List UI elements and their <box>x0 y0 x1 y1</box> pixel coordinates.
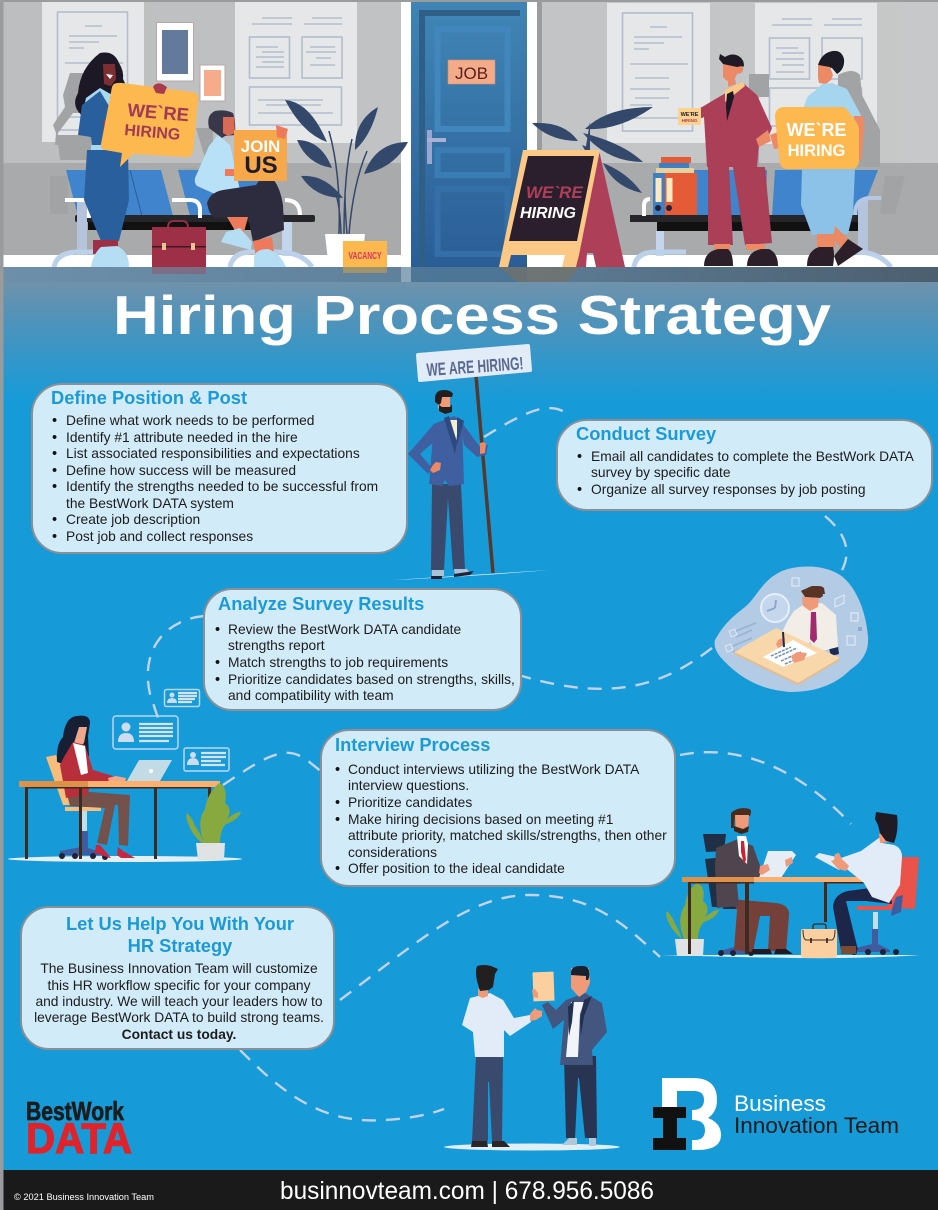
briefcase <box>152 221 206 267</box>
waiting bench: right <box>630 170 891 267</box>
bullet list: analyze survey: • <box>215 655 220 671</box>
bullet list: interview process: Offer position to the ideal candidate <box>348 861 565 876</box>
heading: interview process: Interview Process <box>335 734 490 755</box>
desk <box>19 781 88 787</box>
potted plant and vacancy sign <box>285 100 408 272</box>
seated woman with join us sign <box>195 110 288 267</box>
heading: analyze survey: Analyze Survey Results <box>218 593 424 614</box>
bullet list: define position: • <box>52 479 57 495</box>
left edge rule <box>0 0 4 1210</box>
bullet list: define position: the BestWork DATA system <box>66 496 234 511</box>
a-frame sign: HIRING <box>520 205 576 222</box>
body text: let us help you: The Business Innovation Team will customize <box>40 961 318 976</box>
illustration: two men with document <box>444 965 620 1150</box>
bullet list: interview process: • <box>335 812 340 828</box>
bullet list: conduct survey: survey by specific date <box>591 465 731 480</box>
bullet list: analyze survey: • <box>215 622 220 638</box>
plant <box>186 783 241 860</box>
body text: let us help you: Contact us today. <box>122 1027 236 1042</box>
waiting bench: left <box>54 170 315 267</box>
bullet list: define position: Identify the strengths needed to be successful from <box>66 479 378 494</box>
small card: WE'RE <box>681 112 699 118</box>
bullet list: interview process: • <box>335 762 340 778</box>
figure shadows on wall <box>50 71 905 214</box>
picture frames <box>156 22 225 101</box>
speech sign: we're hiring <box>101 83 198 167</box>
sign: join us <box>234 125 288 181</box>
bullet list: analyze survey: and compatibility with team <box>228 688 394 703</box>
man in white <box>462 965 542 1147</box>
man in red suit holding card <box>678 54 778 266</box>
a-frame sign <box>499 150 625 267</box>
sign: join us: US <box>244 152 278 179</box>
bullet list: conduct survey: Email all candidates to complete the BestWork DATA <box>591 449 915 464</box>
bullet list: define position: • <box>52 529 57 545</box>
bullet list: conduct survey: • <box>577 482 582 498</box>
speech sign: we're hiring: WE`RE <box>127 99 190 125</box>
bullet list: analyze survey: Match strengths to job requirements <box>228 655 448 670</box>
bullet list: define position: Identify #1 attribute needed in the hire <box>66 430 298 445</box>
interviewer <box>731 899 789 952</box>
desk and paper <box>734 628 840 685</box>
bullet list: define position: Define what work needs to be performed <box>66 413 314 428</box>
left plant <box>666 883 719 956</box>
body text: let us help you: leverage BestWork DATA to build strong teams. <box>34 1010 324 1025</box>
bullet list: analyze survey: Prioritize candidates based on strengths, skills, <box>228 672 515 687</box>
bullet list: define position: • <box>52 446 57 462</box>
hero illustration: office waiting room <box>0 0 938 282</box>
bullet list: conduct survey: Organize all survey responses by job posting <box>591 482 866 497</box>
bullet list: define position: • <box>52 413 57 429</box>
bullet list: define position: • <box>52 512 57 528</box>
standing woman with sign <box>75 52 198 267</box>
heading: let us help you: Let Us Help You With Your <box>66 913 294 934</box>
bullet list: interview process: Prioritize candidates <box>348 795 472 810</box>
sign: were hiring: HIRING <box>788 142 845 160</box>
logo: Business Innovation Team: Business <box>734 1091 826 1116</box>
illustration: interview at table <box>660 808 920 958</box>
candidate <box>833 884 892 950</box>
a-frame sign: WE`RE <box>526 183 583 202</box>
chair <box>46 755 72 805</box>
small card <box>678 108 701 125</box>
website and phone: businnovteam.com | 678.956.5086 <box>280 1177 654 1205</box>
vacancy sign <box>343 241 387 272</box>
plant behind a-frame <box>532 107 653 193</box>
bullet list: define position: • <box>52 430 57 446</box>
door <box>401 2 542 267</box>
right wall posters <box>607 3 877 144</box>
woman in blue with sign <box>770 51 864 266</box>
bullet list: define position: Define how success will be measured <box>66 463 296 478</box>
shirt and tie <box>780 603 838 652</box>
bullet list: interview process: interview questions. <box>348 778 469 793</box>
bullet list: analyze survey <box>215 622 515 703</box>
panel: conduct survey <box>557 420 932 510</box>
illustration: man holding we are hiring sign <box>393 344 549 580</box>
illustration: woman at laptop desk <box>8 690 242 862</box>
sign: join us: JOIN <box>241 137 280 156</box>
body text: let us help you <box>34 961 324 1042</box>
bullet list: analyze survey: • <box>215 672 220 688</box>
speech sign: we're hiring: HIRING <box>124 122 181 144</box>
heading: let us help you <box>66 913 294 956</box>
copyright: © 2021 Business Innovation Team <box>14 1192 154 1202</box>
bullet list: define position: • <box>52 463 57 479</box>
sign: we are hiring: WE ARE HIRING! <box>426 353 524 380</box>
woman <box>57 716 90 766</box>
logo: Business Innovation Team: Innovation Team <box>734 1113 899 1138</box>
bullet list: interview process: • <box>335 861 340 877</box>
bullet list: interview process <box>335 762 667 877</box>
illustration: man filling out survey <box>715 566 868 692</box>
bullet list: interview process: Conduct interviews utilizing the BestWork DATA <box>348 762 640 777</box>
bullet list: interview process: considerations <box>348 845 437 860</box>
logo: Business Innovation Team <box>653 1078 899 1150</box>
bullet list: analyze survey: strengths report <box>228 638 325 653</box>
bullet list: analyze survey: Review the BestWork DATA candidate <box>228 622 461 637</box>
candidate cards <box>113 690 229 771</box>
title: Hiring Process Strategy <box>113 285 832 346</box>
bullet list: interview process: attribute priority, matched skills/strengths, then other <box>348 828 667 843</box>
clock <box>761 594 789 622</box>
sign: we are hiring <box>416 344 532 382</box>
man in blue blazer <box>532 966 607 1146</box>
right chair <box>888 857 919 909</box>
logo: BestWork DATA: DATA <box>26 1115 132 1163</box>
body text: let us help you: and industry. We will teach your leaders how to <box>35 994 323 1009</box>
dashed connector paths <box>148 408 851 1120</box>
logo: BestWork DATA: BestWork <box>26 1096 124 1126</box>
bullet list: define position: Post job and collect responses <box>66 529 253 544</box>
binders and books <box>653 157 697 215</box>
vacancy sign: VACANCY <box>348 250 382 262</box>
small card: HIRING <box>682 118 698 123</box>
body text: let us help you: this HR workflow specific for your company <box>48 978 311 993</box>
panel: interview process <box>321 730 675 886</box>
bullet list: define position: List associated responsibilities and expectations <box>66 446 360 461</box>
door sign: JOB <box>448 60 495 84</box>
sign: were hiring: WE`RE <box>786 120 846 140</box>
bullet list: define position <box>52 413 378 545</box>
left chair <box>703 834 726 907</box>
bullet list: interview process: • <box>335 795 340 811</box>
left wall posters <box>42 2 357 143</box>
panel: analyze survey results <box>204 589 521 710</box>
heading: define position: Define Position & Post <box>51 387 247 408</box>
table <box>682 877 754 882</box>
logo: BestWork DATA <box>26 1096 132 1163</box>
laptop <box>127 760 172 781</box>
panel: define position and post <box>32 384 407 553</box>
floor reflection <box>3 267 938 282</box>
door sign: JOB: JOB <box>455 64 488 83</box>
heading: let us help you: HR Strategy <box>128 935 233 956</box>
panel: let us help you <box>21 907 334 1049</box>
bullet list: conduct survey: • <box>577 449 582 465</box>
footer bar <box>4 1170 938 1210</box>
bullet list: conduct survey <box>577 449 915 498</box>
sign: were hiring <box>775 107 859 169</box>
document <box>533 972 555 1001</box>
heading: conduct survey: Conduct Survey <box>576 423 717 444</box>
bag <box>801 924 837 958</box>
bullet list: interview process: Make hiring decisions based on meeting #1 <box>348 812 613 827</box>
bullet list: define position: Create job description <box>66 512 200 527</box>
